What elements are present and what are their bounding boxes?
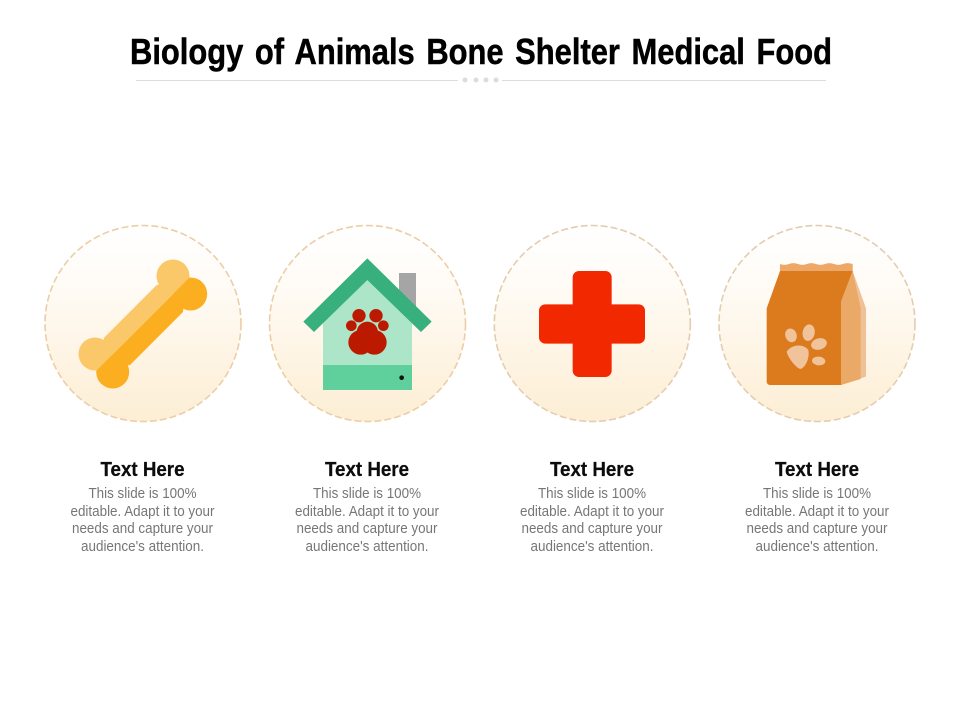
text block: shelter: needs and capture your [296, 520, 438, 537]
text block: medical: needs and capture your [522, 520, 662, 537]
panel: bone [45, 226, 241, 555]
text block: shelter: audience's attention. [306, 538, 428, 555]
text block: shelter: editable. Adapt it to your [295, 503, 439, 520]
icon: house with paw [303, 258, 432, 390]
panel: medical [494, 226, 690, 555]
text block: food: This slide is 100% [763, 485, 871, 502]
circle: bone background [45, 226, 241, 422]
text block: shelter [295, 485, 439, 555]
panel: shelter [270, 226, 466, 555]
text block: bone: editable. Adapt it to your [70, 503, 214, 520]
heading: bone: Text Here [100, 458, 184, 481]
circle: shelter background [270, 226, 466, 422]
icon: medical cross [539, 271, 645, 377]
text block: food: audience's attention. [756, 538, 878, 555]
text block: shelter: This slide is 100% [313, 485, 421, 502]
heading: shelter: Text Here [325, 458, 409, 481]
heading: medical: Text Here [550, 458, 634, 481]
text block: bone: needs and capture your [72, 520, 213, 537]
text block: food [745, 485, 889, 555]
icon: bone [78, 260, 207, 388]
circle: medical background [494, 226, 690, 422]
text block: food: needs and capture your [746, 520, 888, 537]
text block: medical: This slide is 100% [538, 485, 646, 502]
title divider [136, 78, 826, 82]
text block: medical [520, 485, 664, 555]
text block: bone: audience's attention. [81, 538, 204, 555]
text block: medical: audience's attention. [530, 538, 654, 555]
text block: food: editable. Adapt it to your [745, 503, 889, 520]
circle: food background [719, 226, 915, 422]
title: Biology of Animals Bone Shelter Medical Food [130, 31, 832, 72]
heading: food: Text Here [775, 458, 859, 481]
icon: pet food bag [767, 263, 866, 385]
text block: medical: editable. Adapt it to your [520, 503, 664, 520]
text block: bone: This slide is 100% [88, 485, 196, 502]
text block: bone [70, 485, 214, 555]
panel: food [719, 226, 915, 555]
